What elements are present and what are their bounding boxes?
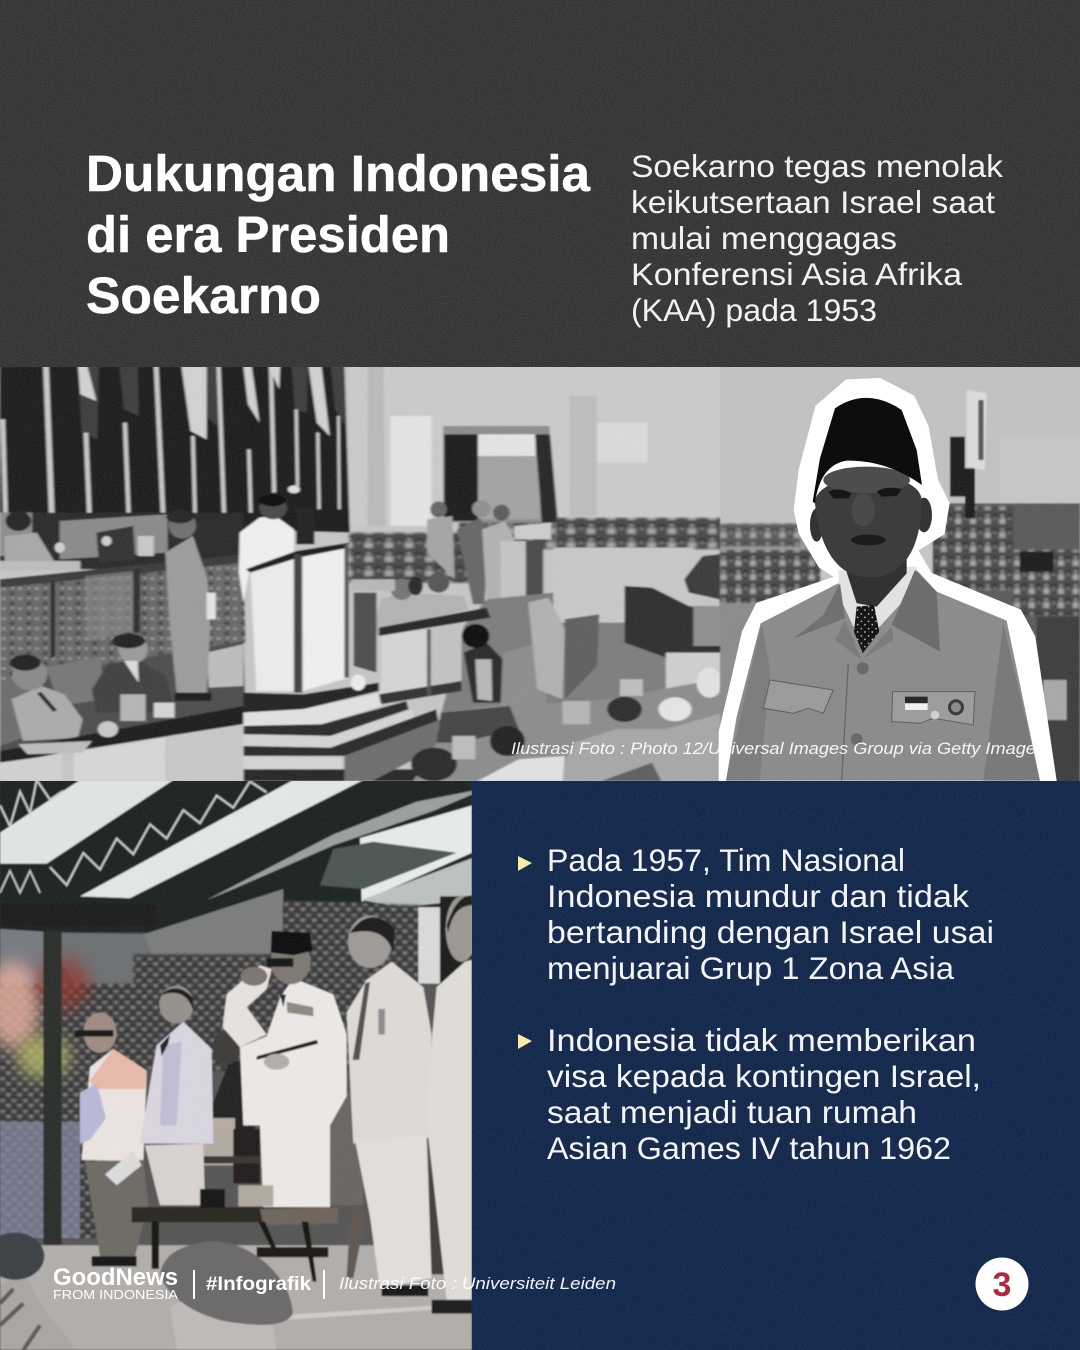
text block: bullet two xyxy=(547,1022,981,1166)
centre desk xyxy=(379,608,490,636)
text block: header intro: keikutsertaan Israel saat xyxy=(631,184,995,220)
icon: bullet arrow two xyxy=(518,1034,532,1049)
armchairs xyxy=(499,646,546,706)
text block: bullet one: menjuarai Grup 1 Zona Asia xyxy=(547,950,954,986)
photo: Soekarno saluting at Asian Games stand xyxy=(0,780,478,1350)
icon: bullet arrow one xyxy=(518,856,532,871)
background chairs xyxy=(327,1093,363,1205)
steps xyxy=(243,683,379,713)
text block: bullet two: visa kepada kontingen Israel, xyxy=(547,1058,981,1094)
angled wall panels xyxy=(143,888,284,956)
lower left table xyxy=(0,706,243,763)
lectern xyxy=(250,552,294,691)
foreground xyxy=(412,682,720,781)
jacket xyxy=(726,570,1040,781)
crowd behind portrait xyxy=(720,367,1080,783)
text block: bullet one xyxy=(547,842,994,986)
pockets xyxy=(763,680,833,713)
floor xyxy=(0,1245,472,1350)
pillar xyxy=(418,907,440,984)
Soekarno xyxy=(240,978,347,1209)
crowd behind xyxy=(349,533,487,583)
divider and hashtag xyxy=(193,1270,325,1299)
front desk with carved panels xyxy=(0,556,246,683)
delegates centre xyxy=(376,594,468,634)
caption: bottom photo credit: Ilustrasi Foto : Universiteit Leiden xyxy=(339,1275,616,1293)
text block: header intro: Soekarno tegas menolak xyxy=(631,148,1003,184)
divider and hashtag: #Infografik xyxy=(206,1274,311,1295)
head xyxy=(810,508,823,542)
crowd xyxy=(132,953,373,1072)
heading: title: Soekarno xyxy=(86,267,321,324)
speaker xyxy=(239,516,294,603)
text block: bullet two: Asian Games IV tahun 1962 xyxy=(547,1130,951,1166)
back seats xyxy=(0,513,243,569)
text block: bullet two: saat menjadi tuan rumah xyxy=(547,1094,917,1130)
heading: title: Dukungan Indonesia xyxy=(86,145,591,202)
page number badge: 3 xyxy=(993,1266,1011,1304)
text block: header intro: Konferensi Asia Afrika xyxy=(631,256,963,292)
peci xyxy=(813,398,922,503)
heading: title xyxy=(86,145,591,324)
text block: header intro: mulai menggagas xyxy=(631,220,897,256)
logo: GoodNews from Indonesia: FROM INDONESIA xyxy=(53,1288,179,1302)
badges xyxy=(905,697,928,703)
neck and shirt xyxy=(838,567,917,630)
panel: navy text background xyxy=(472,781,1080,1350)
buttons xyxy=(857,662,869,674)
roof xyxy=(0,780,472,933)
text block: header intro: (KAA) pada 1953 xyxy=(631,292,877,328)
dark suit man xyxy=(210,1060,255,1129)
white-suit man xyxy=(347,962,432,1144)
text block: header intro xyxy=(631,148,1003,328)
text block: bullet two: Indonesia tidak memberikan xyxy=(547,1022,976,1058)
tie xyxy=(854,605,879,653)
foreground heads xyxy=(1,1279,42,1348)
seated woman xyxy=(464,643,504,703)
far right man xyxy=(427,960,472,1300)
right table xyxy=(623,585,721,658)
text block: bullet one: bertanding dengan Israel usai xyxy=(547,914,994,950)
lectern side + wall block xyxy=(501,541,526,596)
door xyxy=(443,426,550,523)
portrait: Soekarno cutout with white outline xyxy=(720,379,1055,781)
caption: top photo credit: Ilustrasi Foto : Photo 12/Universal Images Group via Getty Images xyxy=(511,740,1045,758)
logo: GoodNews from Indonesia: GoodNews xyxy=(53,1264,178,1291)
man in sunglasses xyxy=(82,1049,147,1162)
man with sash xyxy=(140,1022,213,1144)
table xyxy=(132,1207,338,1222)
heading: title: di era Presiden xyxy=(86,206,450,263)
page number badge xyxy=(976,1258,1028,1310)
seated delegates xyxy=(46,656,103,706)
text block: bullet one: Pada 1957, Tim Nasional xyxy=(547,842,905,878)
collar xyxy=(794,583,845,638)
standing man xyxy=(165,536,210,694)
panel: dark header background xyxy=(0,0,1080,367)
text block: bullet one: Indonesia mundur dan tidak xyxy=(547,878,969,914)
photo: Asian-African Conference hall xyxy=(0,366,1080,783)
